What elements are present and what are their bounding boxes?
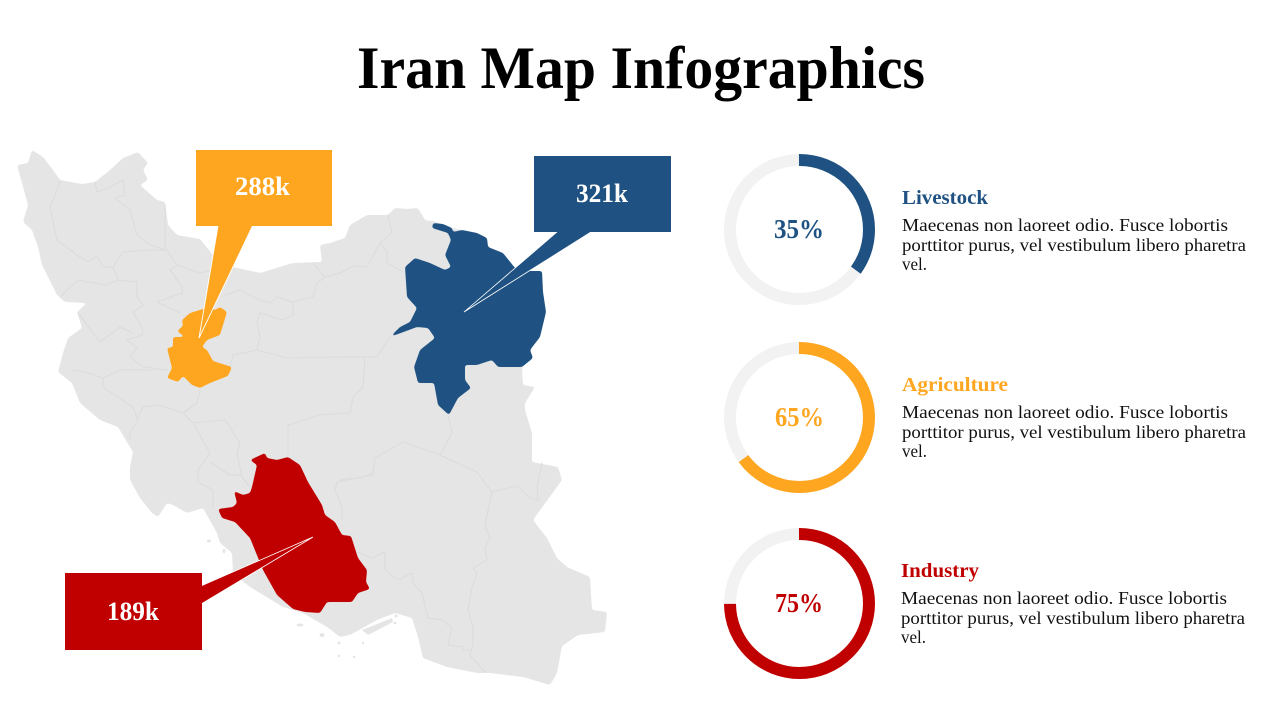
callout: 189k: 189k	[107, 597, 160, 626]
text block: agriculture	[902, 374, 1246, 461]
text block: agriculture: porttitor purus, vel vestibulum libero pharetra	[902, 422, 1246, 442]
region: red province	[218, 453, 370, 613]
donut chart: livestock 35%	[730, 160, 869, 299]
text block: industry: porttitor purus, vel vestibulum libero pharetra	[901, 608, 1245, 628]
text block: agriculture: Agriculture	[902, 374, 1008, 396]
map of Iran	[17, 150, 607, 685]
callout: 288k: 288k	[235, 172, 291, 201]
text block: livestock: Livestock	[902, 187, 989, 209]
text block: agriculture: vel.	[902, 441, 927, 461]
callout: 288k	[196, 150, 332, 338]
text block: industry	[901, 560, 1245, 647]
map base outline	[17, 150, 607, 685]
text block: industry: Industry	[901, 560, 979, 582]
donut chart: agriculture 65%: 65%	[775, 402, 824, 432]
text block: agriculture: Maecenas non laoreet odio. Fusce lobortis	[902, 402, 1228, 422]
donut chart: agriculture 65%	[730, 348, 869, 487]
donut chart: industry 75%: 75%	[775, 588, 823, 618]
region: orange province	[167, 307, 232, 388]
region: blue province	[390, 223, 546, 415]
text block: industry: Maecenas non laoreet odio. Fusce lobortis	[901, 588, 1227, 608]
callout: 321k: 321k	[576, 179, 629, 208]
text block: industry: vel.	[901, 627, 926, 647]
callout: 321k	[464, 156, 671, 312]
donut chart: livestock 35%: 35%	[774, 214, 824, 244]
text block: livestock	[902, 187, 1246, 274]
text block: livestock: porttitor purus, vel vestibulum libero pharetra	[902, 235, 1246, 255]
small islands	[207, 540, 398, 658]
donut chart: industry 75%	[730, 534, 869, 673]
text block: livestock: Maecenas non laoreet odio. Fusce lobortis	[902, 215, 1228, 235]
callout: 189k	[65, 537, 313, 650]
text block: livestock: vel.	[902, 254, 927, 274]
title: Iran Map Infographics	[357, 35, 925, 101]
province borders	[50, 180, 542, 672]
